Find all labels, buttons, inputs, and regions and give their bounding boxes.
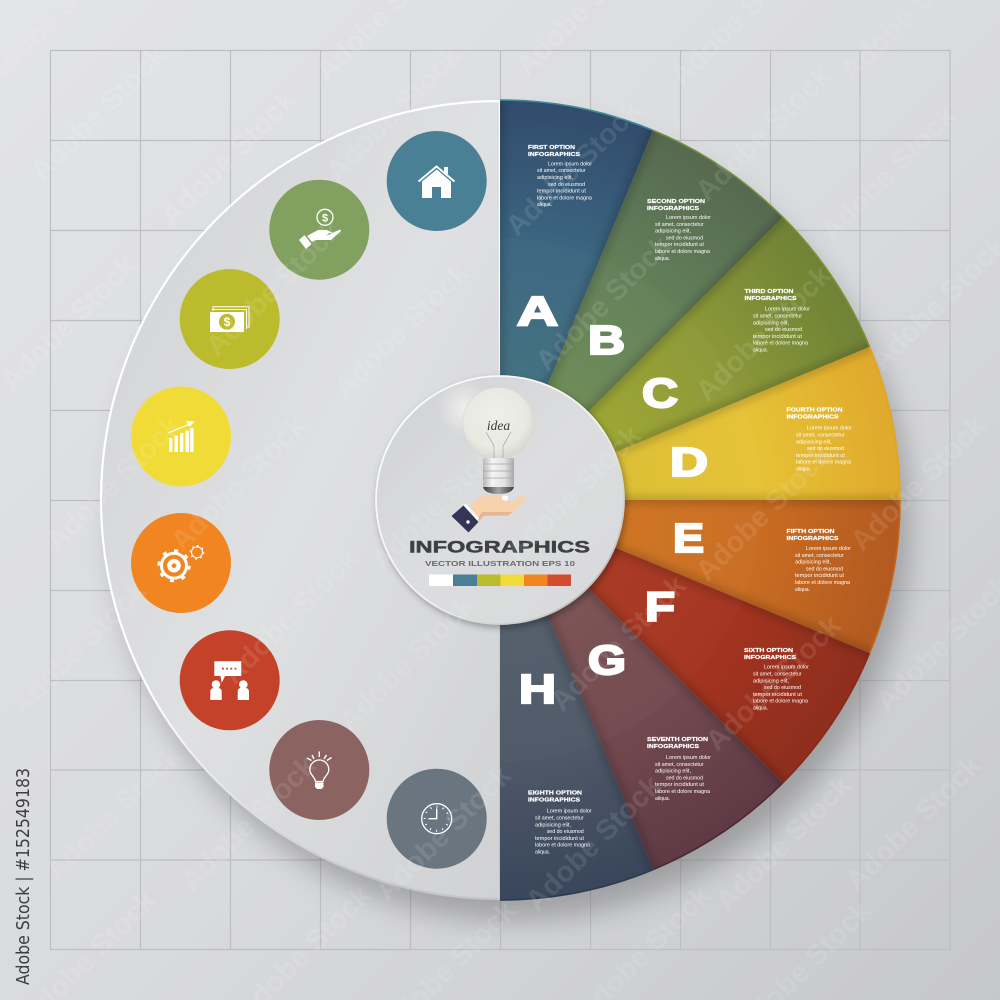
icon circle: hand with coin: [269, 180, 369, 280]
stock watermarks: Adobe Stock: [320, 39, 468, 188]
text: sixth option: tempor incididunt ut: [753, 692, 802, 698]
stock watermarks: Adobe Stock: [690, 259, 838, 408]
text: second option: sit amet, consectetur: [655, 222, 704, 228]
stock watermarks: Adobe Stock: [175, 749, 323, 898]
text: third option: Lorem ipsum dolor: [765, 307, 810, 313]
wedge G: [500, 500, 783, 870]
icon circle: people talking: [180, 630, 280, 730]
text: first option: FIRST OPTION: [528, 145, 576, 151]
stock watermarks: Adobe Stock: [40, 739, 188, 888]
text: seventh option: labore et dolore magna: [655, 789, 711, 795]
text: first option: INFOGRAPHICS: [528, 152, 581, 158]
letter E: E: [673, 515, 704, 561]
text: eighth option: aliqua.: [535, 850, 550, 856]
text: first option: aliqua.: [537, 202, 552, 208]
left semicircle panel: [101, 101, 500, 899]
inner ring highlight: [238, 238, 762, 762]
text: fifth option: FIFTH OPTION: [786, 529, 835, 535]
text: fifth option: sed do eiusmod: [806, 566, 843, 572]
letter F: F: [645, 584, 675, 630]
stock watermarks: Adobe Stock: [845, 409, 993, 558]
text: third option: [744, 289, 810, 354]
hub subtitle: VECTOR ILLUSTRATION EPS 10: [425, 559, 575, 568]
text: seventh option: aliqua.: [655, 796, 670, 802]
text: eighth option: sit amet, consectetur: [535, 816, 584, 822]
text: fifth option: labore et dolore magna: [795, 580, 851, 586]
colour legend bar: [429, 574, 571, 586]
rim arcs: [500, 100, 900, 900]
center hub: [376, 376, 627, 628]
text: eighth option: adipisicing elit,: [535, 822, 571, 828]
stock watermarks: Adobe Stock: [365, 429, 513, 578]
icon circle: hand with coin: $: [322, 212, 328, 224]
text: second option: SECOND OPTION: [647, 199, 706, 205]
text: third option: sed do eiusmod: [765, 327, 802, 333]
stock watermarks: Adobe Stock: [165, 409, 313, 558]
text: first option: labore et dolore magna: [537, 195, 593, 201]
text: fourth option: sed do eiusmod: [807, 446, 844, 452]
text: seventh option: [647, 737, 711, 802]
text: third option: aliqua.: [753, 348, 768, 354]
letter A: A: [517, 288, 558, 334]
icon: idea bulb: [437, 380, 534, 494]
text: seventh option: tempor incididunt ut: [655, 782, 704, 788]
text: sixth option: INFOGRAPHICS: [744, 655, 797, 661]
hub title: INFOGRAPHICS: [409, 538, 590, 556]
text: first option: sed do eiusmod: [548, 182, 585, 188]
stock watermarks: Adobe Stock: [690, 59, 838, 208]
stock watermarks: Adobe Stock: [200, 214, 348, 363]
stock watermarks: Adobe Stock: [500, 419, 648, 568]
text: first option: Lorem ipsum dolor: [548, 161, 592, 167]
text: first option: sit amet, consectetur: [537, 168, 586, 174]
stock watermarks: Adobe Stock: [530, 229, 678, 378]
text: second option: Lorem ipsum dolor: [666, 215, 711, 221]
text: fourth option: INFOGRAPHICS: [786, 415, 839, 421]
text: eighth option: tempor incididunt ut: [535, 836, 584, 842]
text: fifth option: [786, 529, 851, 593]
stock watermarks: Adobe Stock: [840, 749, 988, 898]
text: fourth option: FOURTH OPTION: [786, 408, 843, 414]
stock watermarks: Adobe Stock: [520, 769, 668, 918]
text: seventh option: adipisicing elit,: [655, 769, 691, 775]
text: second option: adipisicing elit,: [655, 229, 691, 235]
stock id label: Adobe Stock | #152549183: [13, 768, 34, 985]
stock watermarks: Adobe Stock: [25, 39, 173, 188]
wedge A: [500, 100, 653, 500]
stock watermarks: Adobe Stock: [40, 409, 188, 558]
text: second option: aliqua.: [655, 256, 670, 262]
text: seventh option: Lorem ipsum dolor: [666, 755, 711, 761]
letter C: C: [642, 370, 678, 416]
hub disc: [376, 376, 624, 624]
text: fifth option: aliqua.: [795, 587, 810, 593]
text: fourth option: aliqua.: [796, 466, 811, 472]
wedge F: [500, 500, 870, 783]
text: second option: labore et dolore magna: [655, 249, 711, 255]
text: eighth option: INFOGRAPHICS: [528, 798, 581, 804]
hub shadow: [377, 378, 627, 628]
icon circle: banknotes: $: [224, 315, 231, 329]
stock watermarks: Adobe Stock: [690, 439, 838, 588]
text: fifth option: adipisicing elit,: [795, 560, 831, 566]
text: fourth option: tempor incididunt ut: [796, 453, 845, 459]
text: fifth option: tempor incididunt ut: [795, 573, 844, 579]
icon circle: gears: [131, 513, 231, 613]
stock watermarks: Adobe Stock: [217, 542, 365, 691]
icon circle: home: [387, 131, 487, 231]
text: first option: tempor incididunt ut: [537, 189, 586, 195]
text: sixth option: aliqua.: [753, 706, 768, 712]
text: seventh option: INFOGRAPHICS: [647, 744, 700, 750]
text: sixth option: labore et dolore magna: [753, 699, 809, 705]
text: third option: sit amet, consectetur: [753, 314, 802, 320]
text: first option: [528, 145, 593, 208]
stock watermarks: Adobe Stock: [700, 609, 848, 758]
wedge D: [500, 347, 900, 500]
wedge H: [500, 500, 653, 900]
icon circle: light bulb: [269, 720, 369, 820]
stock watermarks: Adobe Stock: [500, 94, 648, 243]
wedge B: [500, 130, 783, 500]
text: third option: labore et dolore magna: [753, 341, 809, 347]
text: sixth option: sed do eiusmod: [764, 685, 801, 691]
stock watermarks: Adobe Stock: [5, 574, 153, 723]
stock watermarks: Adobe Stock: [370, 759, 518, 908]
text: second option: sed do eiusmod: [666, 235, 703, 241]
text: eighth option: labore et dolore magna: [535, 843, 591, 849]
wedge fold shadows: [500, 100, 904, 874]
text: sixth option: SIXTH OPTION: [744, 648, 794, 654]
text: second option: INFOGRAPHICS: [647, 206, 700, 212]
wedge E: [500, 500, 900, 653]
letter G: G: [588, 637, 626, 683]
wedge letters: [517, 288, 708, 712]
wedge C: [500, 217, 870, 500]
text: eighth option: sed do eiusmod: [547, 829, 584, 835]
text: sixth option: adipisicing elit,: [753, 678, 789, 684]
text: third option: tempor incididunt ut: [753, 334, 802, 340]
text: seventh option: sed do eiusmod: [666, 775, 703, 781]
letter B: B: [588, 317, 625, 363]
chart shadow: [114, 124, 910, 920]
text: second option: [647, 199, 711, 262]
wedge chart: [500, 100, 900, 900]
text: fifth option: sit amet, consectetur: [795, 553, 844, 559]
text: third option: adipisicing elit,: [753, 320, 789, 326]
text: fifth option: INFOGRAPHICS: [786, 536, 839, 542]
text: fourth option: sit amet, consectetur: [796, 432, 845, 438]
icon: idea bulb: idea: [487, 418, 510, 433]
icon: open hand: [452, 495, 526, 532]
text: third option: THIRD OPTION: [744, 289, 794, 295]
text: eighth option: Lorem ipsum dolor: [547, 809, 592, 815]
text: eighth option: EIGHTH OPTION: [528, 791, 583, 797]
text: sixth option: sit amet, consectetur: [753, 672, 802, 678]
text: second option: tempor incididunt ut: [655, 242, 704, 248]
icon circle: growth chart: [131, 386, 231, 486]
text: seventh option: SEVENTH OPTION: [647, 737, 709, 743]
stock watermarks: Adobe Stock: [545, 569, 693, 718]
letter H: H: [519, 666, 556, 712]
text: first option: adipisicing elit,: [537, 175, 573, 181]
letter D: D: [670, 439, 708, 485]
icon circle: clock: [387, 769, 487, 869]
text: fourth option: Lorem ipsum dolor: [807, 426, 852, 432]
stock watermarks: Adobe Stock: [333, 589, 481, 738]
text: sixth option: Lorem ipsum dolor: [764, 665, 809, 671]
stock watermarks: Adobe Stock: [815, 99, 963, 248]
text: fourth option: [786, 408, 852, 472]
stock watermarks: Adobe Stock: [328, 256, 476, 405]
text: fourth option: labore et dolore magna: [796, 460, 852, 466]
text: third option: INFOGRAPHICS: [744, 296, 797, 302]
icon circle: banknotes: [180, 269, 280, 369]
text: eighth option: [528, 791, 592, 856]
text: sixth option: [744, 648, 809, 712]
text: fourth option: adipisicing elit,: [796, 439, 832, 445]
stock watermarks: Adobe Stock: [155, 84, 303, 233]
stock watermarks: Adobe Stock: [710, 769, 858, 918]
text: seventh option: sit amet, consectetur: [655, 762, 704, 768]
text: fifth option: Lorem ipsum dolor: [806, 546, 851, 552]
